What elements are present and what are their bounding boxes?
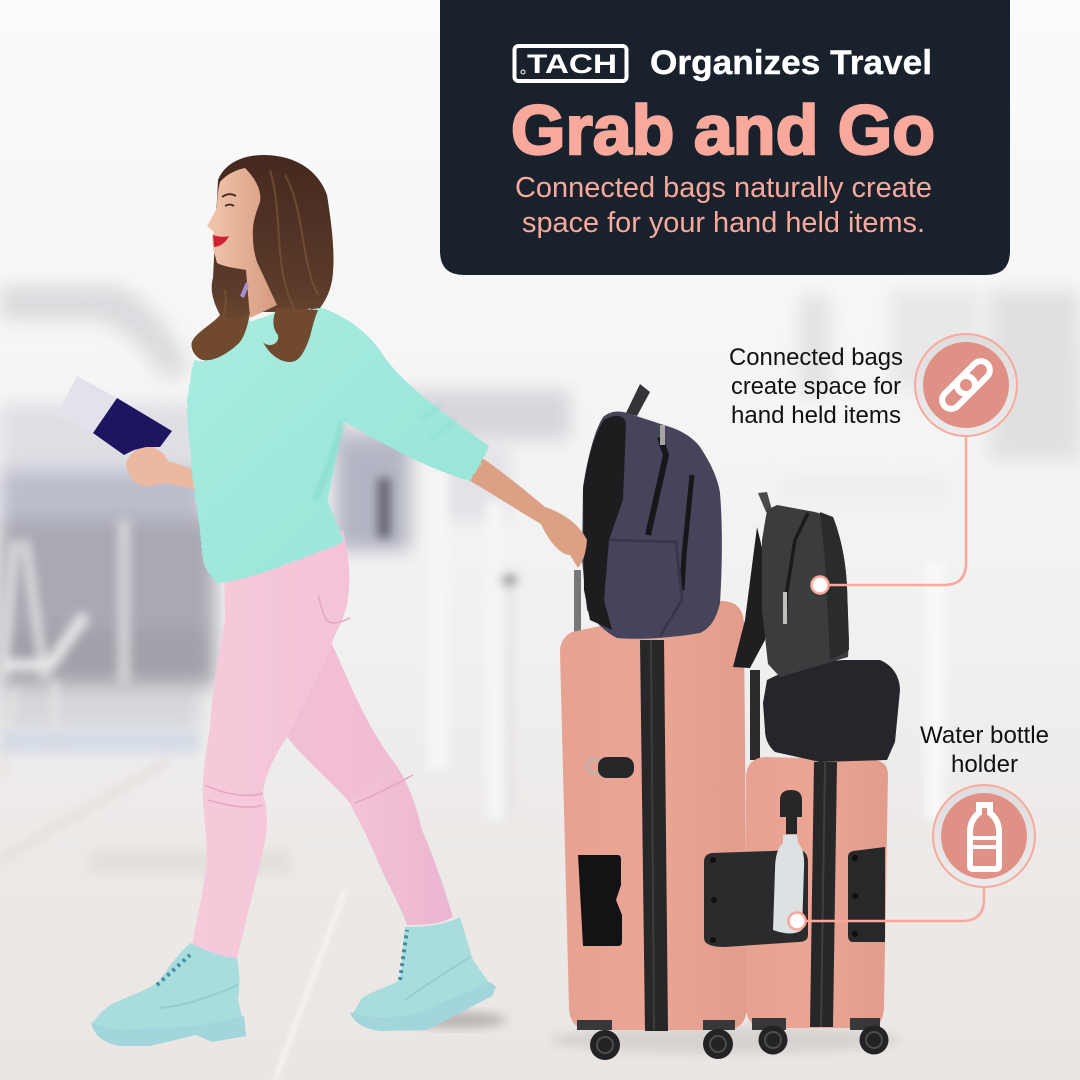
large suitcase wheels bbox=[577, 1020, 735, 1060]
small suitcase right plate bbox=[848, 847, 885, 942]
far arm and hand bbox=[126, 445, 200, 491]
hair curls over sweater bbox=[192, 308, 318, 362]
pink trousers bbox=[192, 530, 453, 958]
lips bbox=[213, 235, 229, 247]
woman: walking figure bbox=[57, 155, 587, 1046]
callout text bbox=[729, 344, 903, 429]
boot shadow bbox=[410, 1012, 506, 1028]
far boot bbox=[350, 917, 496, 1031]
side connector plate bbox=[578, 855, 622, 946]
small suitcase bbox=[746, 670, 888, 1054]
connector line and dot bbox=[812, 428, 966, 594]
icon: chain link bbox=[915, 334, 1017, 436]
face and neck bbox=[207, 168, 277, 318]
logo: TACH: TACH bbox=[527, 49, 617, 79]
connector line and dot bbox=[788, 880, 984, 930]
subtitle text: space for your hand held items. bbox=[522, 207, 925, 239]
subtitle text bbox=[515, 172, 932, 239]
boarding pass bbox=[57, 376, 117, 433]
small backpack bbox=[733, 492, 849, 677]
logo: TACH bbox=[514, 46, 626, 81]
heading: Organizes Travel: Organizes Travel bbox=[650, 44, 932, 82]
floor shadow under luggage bbox=[550, 1026, 900, 1054]
small suitcase wheels bbox=[752, 1018, 888, 1054]
callout: water bottle holder bbox=[788, 722, 1049, 930]
bottle clip bbox=[780, 790, 802, 834]
water bottle bbox=[773, 835, 804, 934]
large suitcase bbox=[560, 570, 747, 1060]
lock clip on large suitcase bbox=[587, 757, 634, 778]
callout text: create space for bbox=[731, 373, 901, 400]
callout: connected bags bbox=[729, 334, 1017, 594]
cube bag bbox=[763, 660, 900, 762]
panel: dark header card bbox=[440, 0, 1010, 275]
connector plate with bottle holder bbox=[704, 790, 858, 947]
near boot bbox=[91, 943, 246, 1046]
earring bbox=[240, 282, 249, 298]
callout text: holder bbox=[951, 751, 1018, 778]
large backpack bbox=[582, 384, 722, 639]
passport bbox=[93, 398, 172, 455]
icon: water bottle bbox=[933, 785, 1035, 887]
callout text bbox=[920, 722, 1049, 778]
hair bbox=[192, 155, 334, 362]
sweater bbox=[187, 308, 489, 583]
callout text: Water bottle bbox=[920, 722, 1049, 749]
title: Grab and Go: Grab and Go bbox=[511, 91, 935, 169]
callout text: Connected bags bbox=[729, 344, 903, 371]
callout text: hand held items bbox=[731, 402, 901, 429]
subtitle text: Connected bags naturally create bbox=[515, 172, 932, 204]
extended arm and hand bbox=[470, 455, 587, 568]
eye and brow bbox=[222, 194, 236, 206]
hair highlights bbox=[205, 170, 318, 345]
